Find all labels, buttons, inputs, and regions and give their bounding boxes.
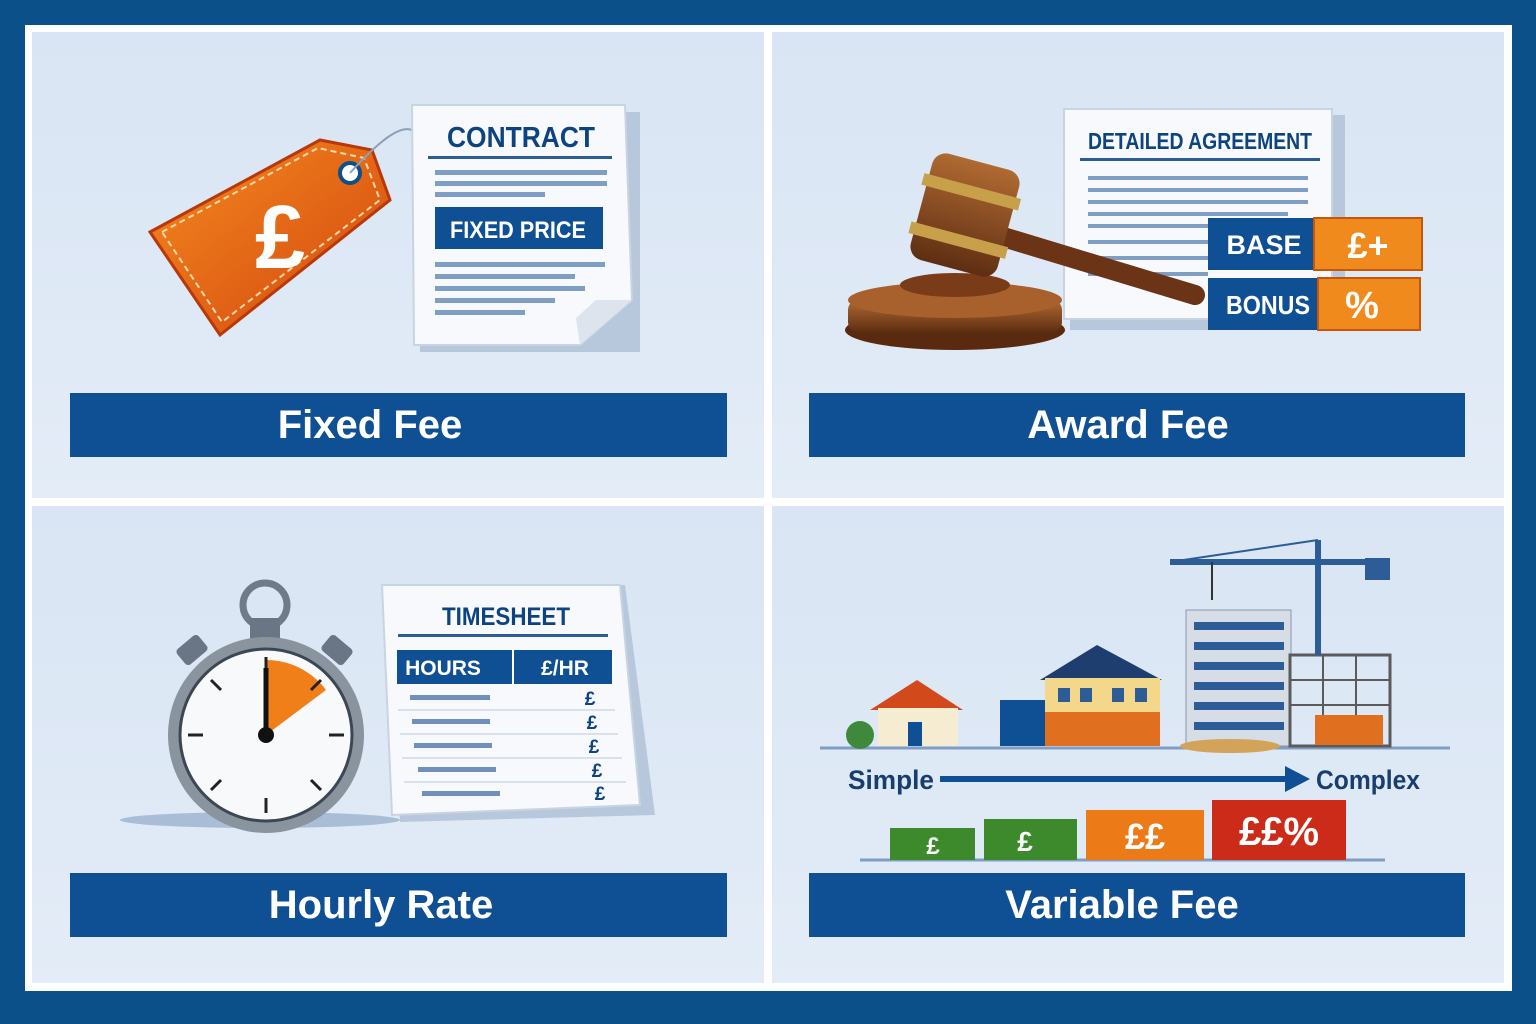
panel: fixed fee [32,32,764,498]
icon: timesheet: £/HR [541,657,589,680]
icon: contract document: FIXED PRICE [450,217,586,244]
chart: fee blocks [860,800,1385,860]
icon: price tag [150,129,412,335]
panel: hourly rate [32,506,764,983]
chart: fee blocks: £ [926,833,940,860]
icon: base and bonus boxes: BASE [1226,230,1302,260]
icon: price tag: £ [255,188,305,288]
heading: Award Fee: Award Fee [1027,403,1229,447]
icon: timesheet: TIMESHEET [442,603,570,631]
heading: Variable Fee [809,873,1465,937]
heading: Award Fee [809,393,1465,457]
heading: Hourly Rate [70,873,727,937]
arrow: simple to complex: Complex [1316,765,1420,795]
icon: detailed agreement document: DETAILED AGREEMENT [1088,128,1312,154]
icon: detailed agreement document [1064,109,1345,330]
icon: base and bonus boxes: BONUS [1226,290,1310,320]
chart: fee blocks: ££ [1125,816,1165,857]
icon: timesheet: £ [589,737,600,758]
chart: fee blocks: £ [1017,826,1033,857]
icon: timesheet [382,585,655,822]
icon: timesheet: £ [585,689,596,710]
icon: timesheet: £ [587,713,598,734]
icon: base and bonus boxes: £+ [1347,225,1389,266]
arrow: simple to complex: Simple [848,765,934,795]
heading: Fixed Fee [70,393,727,457]
arrow: simple to complex [848,765,1420,795]
icon: contract document: CONTRACT [447,122,595,154]
icon: contract document [412,105,640,352]
chart: fee blocks: ££% [1239,810,1319,854]
icon: stopwatch [120,583,400,833]
icon: base and bonus boxes: % [1345,285,1379,327]
heading: Variable Fee: Variable Fee [1005,883,1239,927]
icon: timesheet: HOURS [405,657,481,680]
panel: variable fee [772,506,1504,983]
heading: Hourly Rate: Hourly Rate [269,883,493,927]
icon: gavel [845,149,1195,350]
heading: Fixed Fee: Fixed Fee [278,403,462,447]
icon: base and bonus boxes [1208,218,1422,330]
icon: timesheet: £ [592,761,603,782]
icon: buildings progression [820,540,1450,753]
icon: timesheet: £ [595,784,606,805]
panel: award fee [772,32,1504,498]
